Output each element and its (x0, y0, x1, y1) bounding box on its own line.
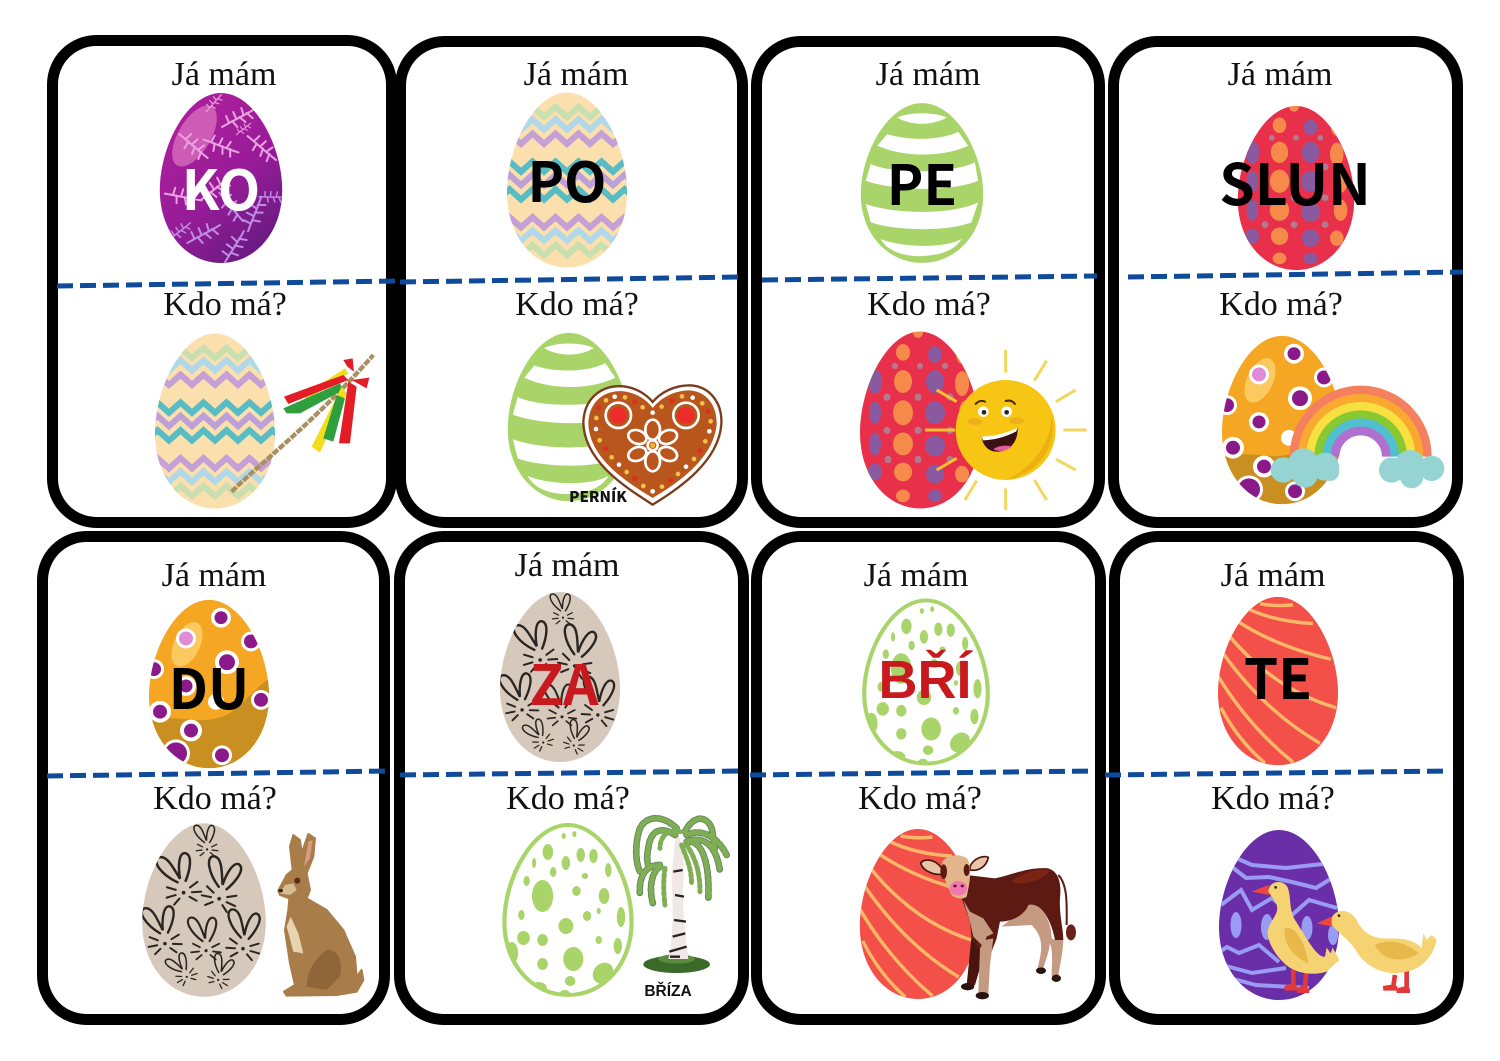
card 4: SLUN (1114, 42, 1463, 522)
egg: zigzag with syllable PO (498, 92, 636, 268)
heading: Kdo má?: Kdo má? (163, 286, 287, 323)
card 6: ZA (400, 536, 744, 1020)
icon: birch tree (636, 818, 727, 973)
heading: Já mám: Já mám (1228, 56, 1332, 93)
egg: red dots with syllable SLUN (1219, 102, 1371, 270)
egg: stripes with syllable PE (861, 103, 983, 263)
icon: ducks (1252, 882, 1437, 991)
card 1: KO (52, 40, 397, 522)
heading: Já mám: Já mám (524, 56, 628, 93)
label: BŘÍZA: BŘÍZA (644, 982, 692, 1000)
egg: gold with syllable DU: DU (169, 645, 249, 725)
cut line (400, 277, 740, 282)
egg: red dots (860, 327, 980, 508)
egg: rabbit prints (141, 823, 266, 997)
egg: red dots with syllable SLUN: SLUN (1219, 140, 1371, 222)
heading: Kdo má?: Kdo má? (867, 286, 991, 323)
icon: hare (278, 834, 363, 996)
egg: green dots (504, 825, 632, 998)
heading: Já mám: Já mám (1221, 557, 1325, 594)
heading: Kdo má?: Kdo má? (1211, 780, 1335, 817)
egg: stripes with syllable PE: PE (887, 141, 957, 221)
egg: rabbit prints with syllable ZA: ZA (530, 641, 599, 721)
icon: gingerbread heart (583, 385, 721, 505)
heading: Kdo má?: Kdo má? (506, 780, 630, 817)
heading: Já mám: Já mám (515, 547, 619, 584)
icon: rainbow with clouds (1271, 390, 1444, 488)
cut line (400, 771, 740, 775)
heading: Já mám: Já mám (864, 557, 968, 594)
heading: Já mám: Já mám (162, 557, 266, 594)
egg: green stripes (508, 333, 630, 501)
card 2: PO (400, 42, 742, 522)
egg: rabbit prints with syllable ZA (499, 592, 620, 762)
cut line (47, 771, 390, 776)
card 7: BŘÍ (750, 536, 1100, 1020)
cut line (57, 281, 397, 286)
heading: Kdo má?: Kdo má? (153, 780, 277, 817)
icon: Easter whip (232, 355, 373, 492)
egg: violet waves (1219, 830, 1339, 1000)
egg: green dots with syllable BŘÍ (864, 600, 988, 766)
egg: pastel zigzag (146, 333, 284, 509)
heading: Kdo má?: Kdo má? (1219, 286, 1343, 323)
egg: gold with syllable DU (144, 600, 271, 773)
card 3: PE (756, 42, 1100, 522)
egg: zigzag with syllable PO: PO (527, 138, 607, 218)
card 8: TE (1105, 536, 1458, 1020)
cut line (1128, 272, 1463, 277)
card 5: DU (42, 536, 390, 1020)
icon: smiling sun (925, 350, 1087, 510)
egg: purple with syllable KO (160, 93, 285, 263)
heading: Já mám: Já mám (172, 56, 276, 93)
cut line (1105, 771, 1450, 775)
icon: calf (921, 855, 1076, 999)
egg: gold (1217, 336, 1344, 509)
egg: red stripes with syllable TE (1218, 597, 1338, 765)
cut line (750, 771, 1095, 775)
label: PERNÍK: PERNÍK (569, 485, 627, 507)
egg: red stripes with syllable TE: TE (1244, 635, 1312, 715)
egg: purple with syllable KO: KO (182, 146, 260, 226)
heading: Kdo má?: Kdo má? (858, 780, 982, 817)
heading: Já mám: Já mám (876, 56, 980, 93)
heading: Kdo má?: Kdo má? (515, 286, 639, 323)
cut line (762, 276, 1097, 280)
egg: green dots with syllable BŘÍ: BŘÍ (878, 649, 973, 710)
egg: red stripes (860, 829, 976, 999)
